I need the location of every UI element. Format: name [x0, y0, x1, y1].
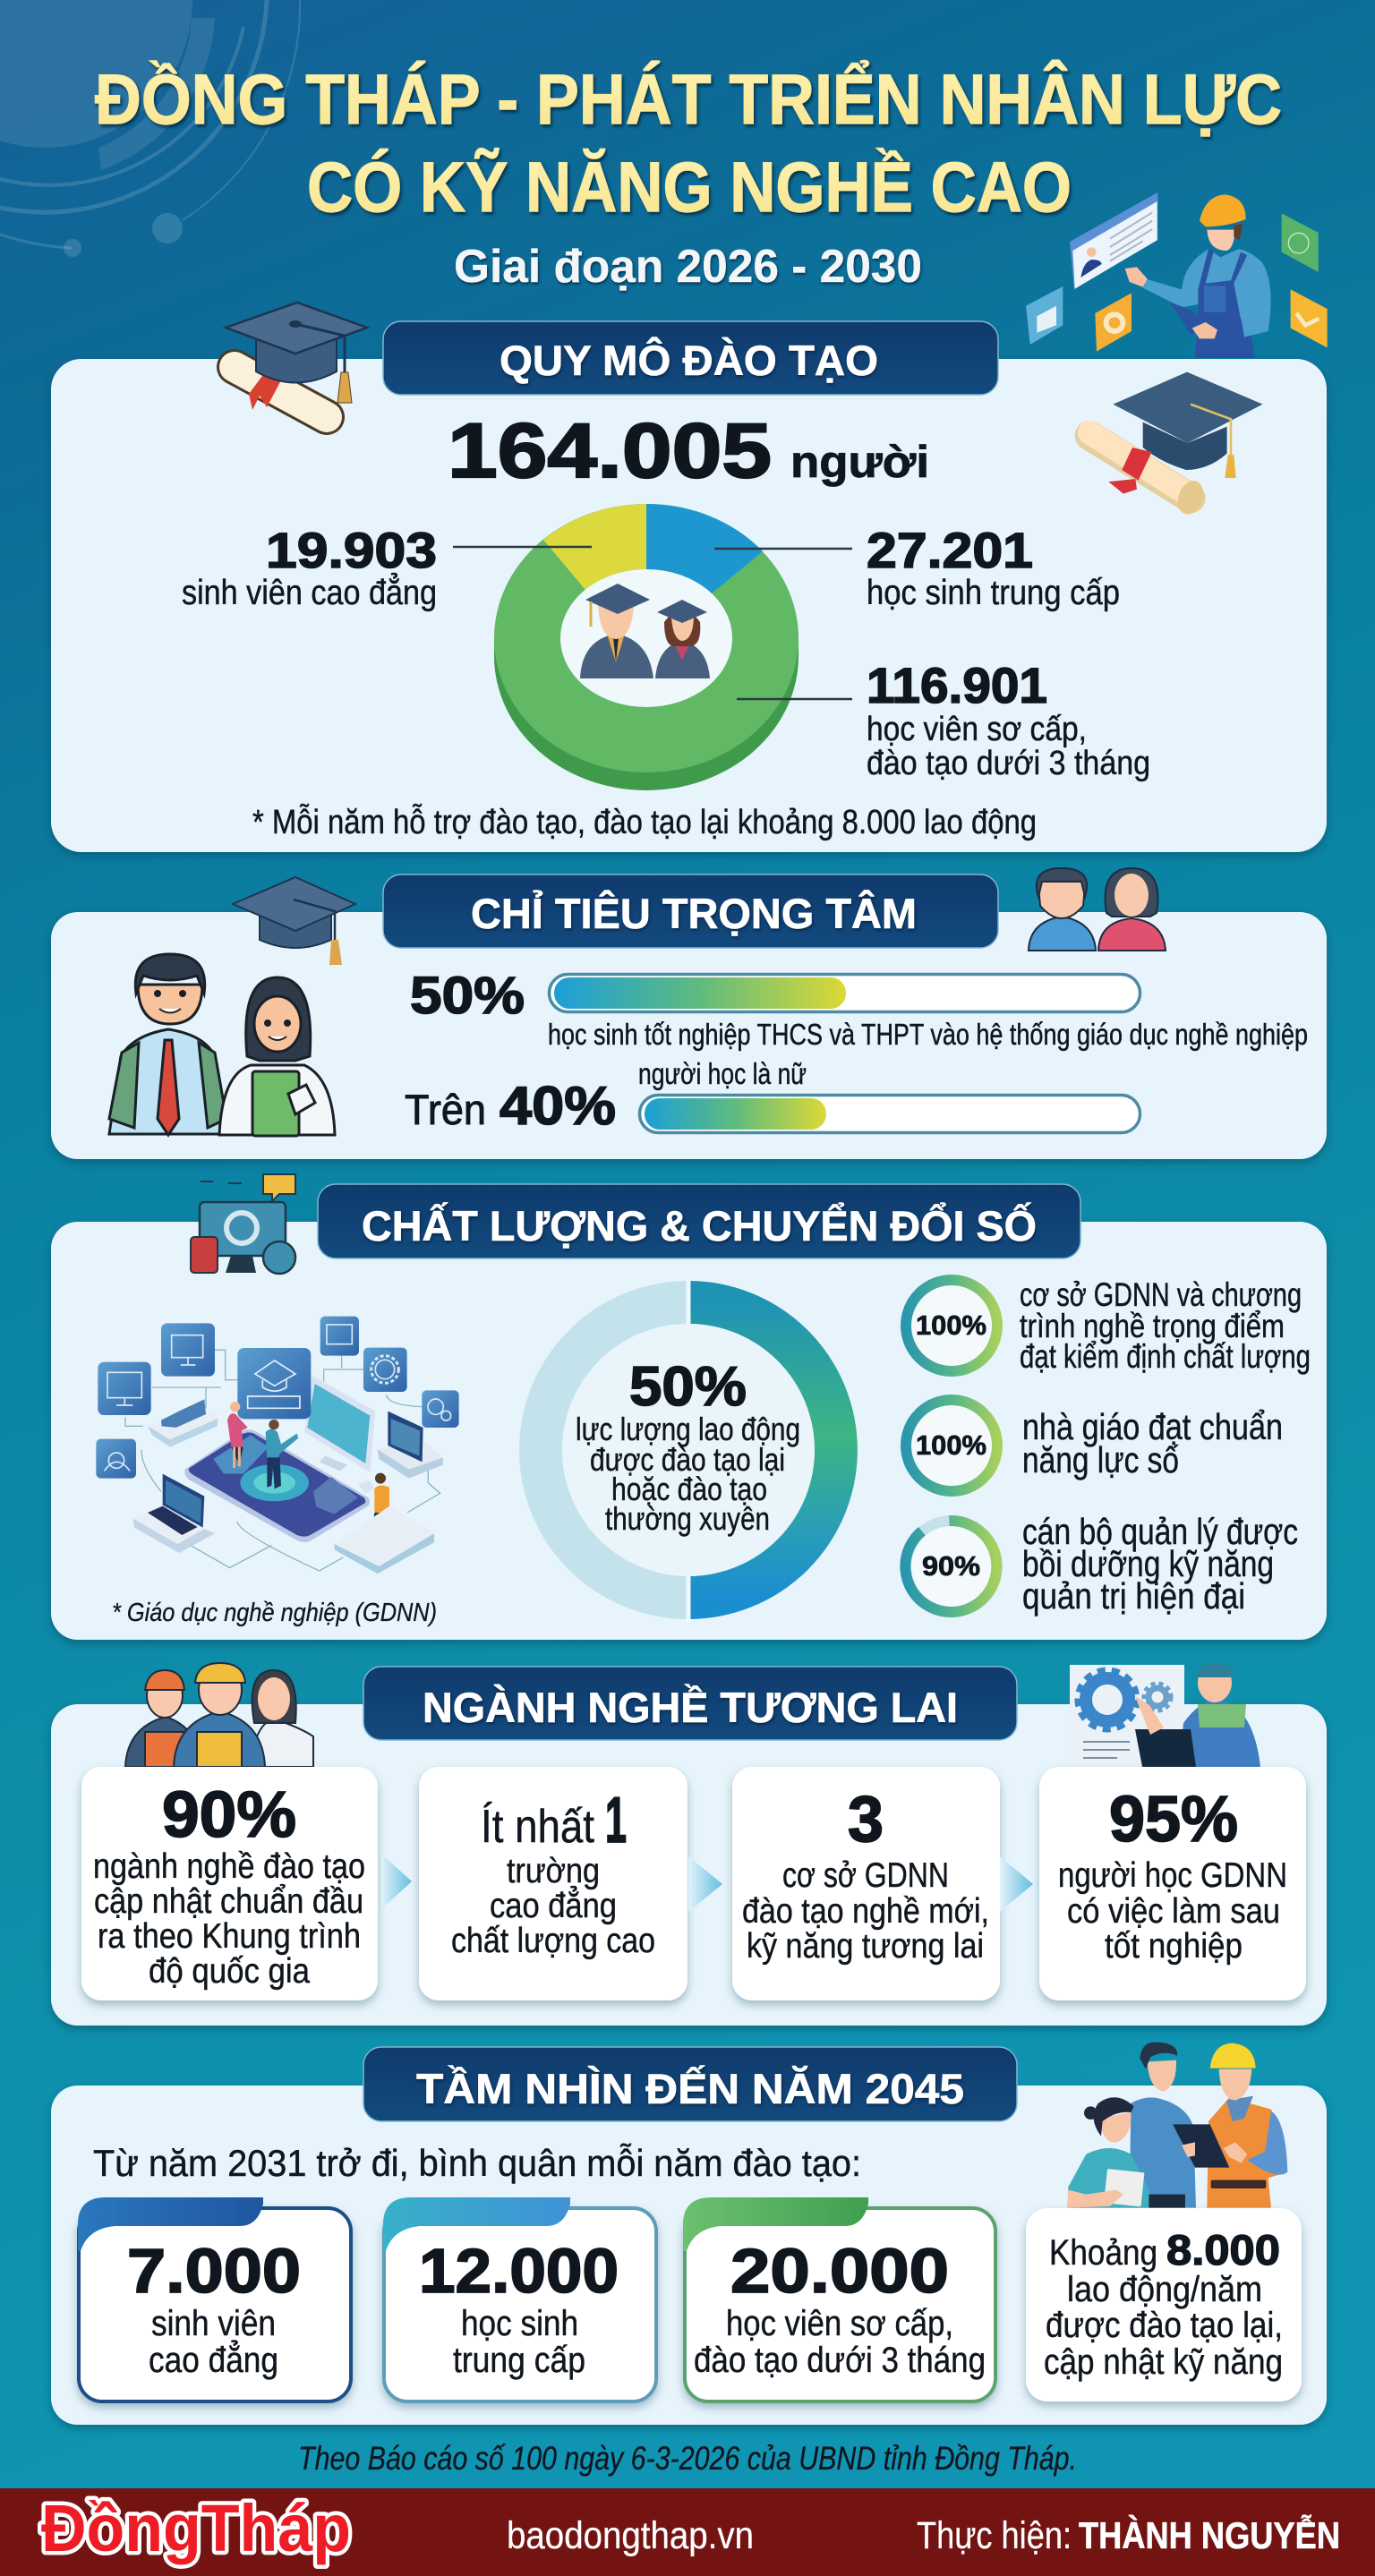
section heading: quy mô đào tạo	[383, 321, 998, 395]
icon: engineer with gears	[1070, 1663, 1260, 1767]
label: cao đẳng: 19.903	[266, 522, 437, 578]
total figure	[448, 408, 929, 494]
section heading: quy mô đào tạo: QUY MÔ ĐÀO TẠO	[500, 337, 878, 384]
card: at least 1 college: 1	[605, 1785, 627, 1856]
card: 95 percent: có việc làm sau	[1067, 1892, 1280, 1931]
icon: cap and diploma right	[1089, 372, 1263, 518]
section heading: tầm nhìn đến năm 2045: TẦM NHÌN ĐẾN NĂM 2045	[416, 2065, 964, 2112]
metric: quality accreditation 100 percent: đạt kiểm định chất lượng	[1020, 1338, 1311, 1375]
icon: digital monitor	[191, 1174, 295, 1274]
decorative tech circles	[0, 0, 300, 257]
card: 90 percent: ngành nghề đào tạo	[93, 1847, 365, 1886]
section heading: tầm nhìn đến năm 2045	[363, 2047, 1017, 2121]
footer	[0, 2488, 1375, 2576]
metric: above 40 percent: 40%	[500, 1076, 616, 1136]
card: 8.000 retrained workers: 8.000	[1166, 2226, 1280, 2273]
section heading: ngành nghề tương lai	[363, 1667, 1017, 1740]
card: at least 1 college: Ít nhất	[481, 1801, 594, 1853]
arrow	[1000, 1856, 1033, 1912]
footnote: GDNN: * Giáo dục nghề nghiệp (GDNN)	[112, 1599, 437, 1627]
leader lines	[453, 547, 852, 699]
label: cao đẳng	[182, 522, 437, 612]
card: 8.000 retrained workers: được đào tạo lại,	[1046, 2306, 1283, 2345]
card: 95 percent: người học GDNN	[1058, 1856, 1287, 1895]
metric: 50 percent: 50%	[410, 967, 525, 1025]
metric: managers 90 percent	[903, 1511, 1298, 1616]
section heading: chất lượng và chuyển đổi số	[318, 1184, 1080, 1258]
laptop	[163, 1474, 204, 1528]
metric: above 40 percent: người học là nữ	[638, 1057, 807, 1090]
card: 90 percent	[81, 1767, 378, 2000]
section heading: chỉ tiêu trọng tâm: CHỈ TIÊU TRỌNG TÂM	[471, 890, 917, 937]
metric: digital teachers 100 percent: nhà giáo đạt chuẩn	[1022, 1406, 1283, 1447]
card: 20.000 primary trainees: học viên sơ cấp,	[726, 2304, 953, 2343]
chart: 50 percent ring: 50%	[629, 1356, 747, 1418]
panel: ngành nghề tương lai	[51, 1663, 1327, 2026]
card: 3 institutions: cơ sở GDNN	[782, 1856, 949, 1895]
credit: Thực hiện:	[917, 2514, 1072, 2557]
title	[95, 59, 1282, 226]
metric: managers 90 percent: 90%	[922, 1550, 980, 1582]
label: cao đẳng: sinh viên cao đẳng	[182, 573, 437, 612]
credit	[917, 2513, 1340, 2557]
card: at least 1 college	[419, 1767, 688, 2000]
metric: digital teachers 100 percent: năng lực số	[1022, 1439, 1179, 1480]
metric: digital teachers 100 percent	[906, 1400, 1283, 1491]
section heading: ngành nghề tương lai: NGÀNH NGHỀ TƯƠNG LAI	[423, 1684, 958, 1731]
card: 90 percent: độ quốc gia	[149, 1952, 310, 1991]
label: sơ cấp: học viên sơ cấp,	[867, 711, 1087, 748]
icon: two student avatars	[1029, 868, 1166, 951]
card: 90 percent: cập nhật chuẩn đầu	[94, 1882, 363, 1921]
card: at least 1 college: chất lượng cao	[451, 1922, 655, 1960]
card: 95 percent: tốt nghiệp	[1105, 1927, 1243, 1966]
illustration: digital education platform	[96, 1317, 459, 1574]
icon: graduation cap	[233, 877, 355, 965]
metric: above 40 percent: Trên	[405, 1086, 486, 1133]
card: 20.000 primary trainees: đào tạo dưới 3 tháng	[694, 2341, 986, 2380]
card: 12.000 vocational students: trung cấp	[453, 2341, 585, 2380]
card: 7.000 college students: sinh viên	[151, 2304, 276, 2343]
section heading: chất lượng và chuyển đổi số: CHẤT LƯỢNG & CHUYỂN ĐỔI SỐ	[362, 1202, 1037, 1250]
illustration: three colleagues	[1067, 2043, 1287, 2208]
title: CÓ KỸ NĂNG NGHỀ CAO	[307, 147, 1072, 226]
section heading: chỉ tiêu trọng tâm	[383, 874, 998, 948]
metric: quality accreditation 100 percent: cơ sở GDNN và chương	[1020, 1276, 1302, 1313]
card: at least 1 college: trường	[507, 1852, 600, 1890]
icon: three workers	[125, 1663, 313, 1767]
metric: quality accreditation 100 percent	[906, 1276, 1311, 1375]
metric: quality accreditation 100 percent: 100%	[916, 1309, 986, 1341]
icon: cap and diploma left	[226, 303, 367, 417]
card: 12.000 vocational students: 12.000	[419, 2236, 619, 2306]
card: 8.000 retrained workers: lao động/năm	[1067, 2270, 1262, 2309]
icon: graduates	[580, 584, 710, 678]
total figure: người	[790, 437, 929, 487]
pad	[334, 1506, 434, 1566]
card: 8.000 retrained workers	[1026, 2208, 1302, 2401]
card: at least 1 college: cao đẳng	[490, 1886, 617, 1925]
card: 7.000 college students: cao đẳng	[149, 2339, 278, 2380]
subtitle: Giai đoạn 2026 - 2030	[454, 241, 922, 293]
card: 12.000 vocational students	[383, 2197, 656, 2401]
chart: donut of trainee groups	[494, 504, 799, 790]
metric: above 40 percent	[405, 1057, 1140, 1136]
card: 3 institutions: đào tạo nghề mới,	[742, 1892, 989, 1931]
chart: 50 percent ring: hoặc đào tạo	[611, 1471, 767, 1507]
card: 3 institutions: kỹ năng tương lai	[747, 1927, 984, 1966]
website: baodongthap.vn	[507, 2514, 754, 2557]
metric: 50 percent	[410, 967, 1308, 1051]
credit: THÀNH NGUYỄN	[1079, 2513, 1340, 2556]
card: 7.000 college students	[78, 2197, 351, 2401]
metric: managers 90 percent: bồi dưỡng kỹ năng	[1022, 1543, 1274, 1584]
title: ĐỒNG THÁP - PHÁT TRIỂN NHÂN LỰC	[95, 59, 1282, 139]
panel: chỉ tiêu trọng tâm	[51, 868, 1327, 1159]
arrow	[381, 1854, 412, 1909]
label: sơ cấp: đào tạo dưới 3 tháng	[867, 745, 1150, 782]
chart: 50 percent ring: lực lượng lao động	[576, 1411, 800, 1447]
card: 7.000 college students: 7.000	[127, 2236, 301, 2306]
card: 95 percent	[1039, 1767, 1306, 2000]
metric: quality accreditation 100 percent: trình nghề trọng điểm	[1020, 1308, 1285, 1344]
illustration: students	[109, 954, 335, 1136]
source note: Theo Báo cáo số 100 ngày 6-3-2026 của UBND tỉnh Đồng Tháp.	[298, 2440, 1077, 2477]
presenters	[227, 1413, 248, 1447]
label: trung cấp: học sinh trung cấp	[867, 574, 1120, 612]
icon: worker with floating screens	[1026, 192, 1328, 358]
arrow	[688, 1856, 722, 1912]
label: sơ cấp	[867, 657, 1150, 782]
card: 3 institutions	[732, 1767, 1000, 2000]
panel: chất lượng và chuyển đổi số	[51, 1174, 1327, 1640]
card: 20.000 primary trainees: 20.000	[730, 2236, 949, 2306]
logo: ĐồngTháp	[41, 2491, 351, 2565]
chart: 50 percent ring: được đào tạo lại	[590, 1441, 785, 1478]
metric: managers 90 percent: cán bộ quản lý được	[1022, 1511, 1298, 1552]
intro sentence: Từ năm 2031 trở đi, bình quân mỗi năm đào tạo:	[93, 2142, 861, 2184]
label: trung cấp	[867, 522, 1120, 612]
label: trung cấp: 27.201	[867, 522, 1033, 578]
card: 90 percent: 90%	[162, 1779, 296, 1851]
card: 20.000 primary trainees	[683, 2197, 995, 2401]
label: sơ cấp: 116.901	[867, 657, 1047, 713]
footnote: * Mỗi năm hỗ trợ đào tạo, đào tạo lại khoảng 8.000 lao động	[252, 803, 1037, 841]
card: 95 percent: 95%	[1109, 1784, 1238, 1855]
panel: tầm nhìn đến năm 2045	[51, 2043, 1327, 2425]
total figure: 164.005	[448, 408, 772, 494]
card: 12.000 vocational students: học sinh	[461, 2304, 578, 2343]
card: 8.000 retrained workers: cập nhật kỹ năng	[1044, 2342, 1283, 2382]
chart: 50 percent ring	[541, 1278, 836, 1622]
card: 90 percent: ra theo Khung trình	[98, 1917, 361, 1956]
card: 8.000 retrained workers: Khoảng	[1049, 2233, 1157, 2273]
chart: 50 percent ring: thường xuyên	[605, 1500, 770, 1537]
metric: managers 90 percent: quản trị hiện đại	[1022, 1575, 1245, 1616]
metric: digital teachers 100 percent: 100%	[916, 1429, 986, 1461]
panel: quy mô đào tạo	[51, 303, 1327, 852]
card: 3 institutions: 3	[848, 1784, 884, 1855]
